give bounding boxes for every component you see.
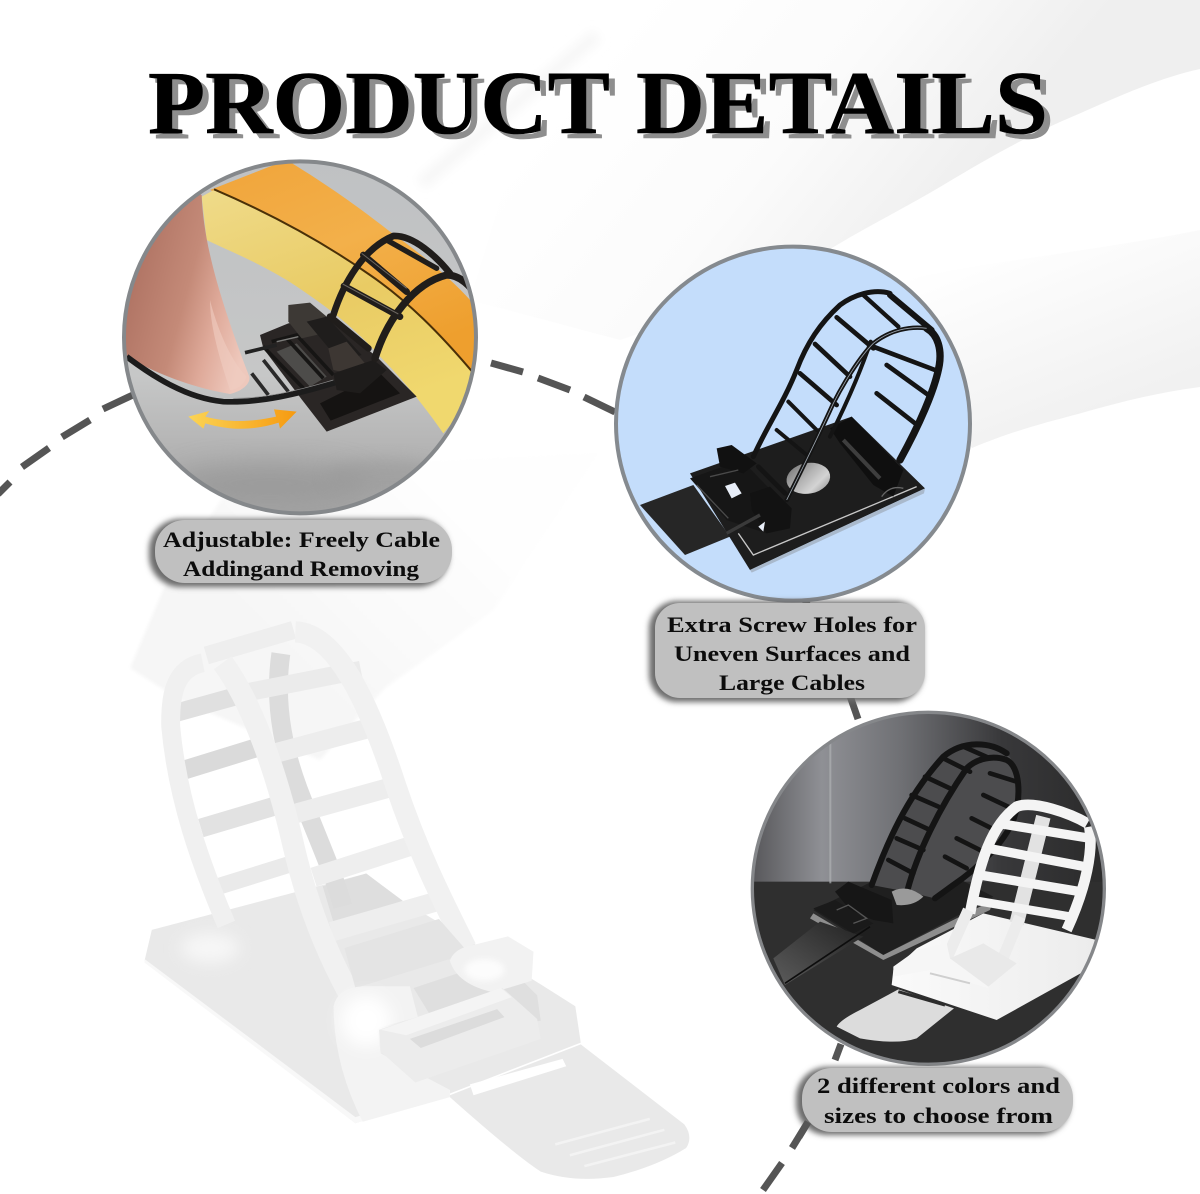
callout: colors and sizes: sizes to choose from <box>824 1103 1053 1128</box>
black ladder loop <box>872 744 1018 898</box>
cable clip body <box>260 317 417 432</box>
callout: screw holes: Large Cables <box>719 670 866 695</box>
slider and blocks <box>690 478 702 492</box>
title: PRODUCT <box>148 54 610 153</box>
yellow cable <box>202 189 475 433</box>
ladder loop <box>753 292 940 500</box>
mount ridge <box>830 417 903 497</box>
panel: adjustable photo circle <box>120 160 480 520</box>
panel: two colors photo circle <box>750 710 1110 1072</box>
title <box>148 54 1054 158</box>
black wire <box>127 357 335 402</box>
white ladder loop <box>947 805 1090 973</box>
white clip base <box>892 913 1097 1020</box>
black clip strap <box>773 922 863 985</box>
locking blocks <box>288 303 327 338</box>
ladder strap loop <box>330 236 477 358</box>
clip strap with slit <box>450 1044 689 1179</box>
callout: adjustable: Adjustable: Freely Cable <box>163 527 440 552</box>
slider frame <box>277 343 327 387</box>
callout: colors and sizes: 2 different colors and <box>817 1073 1060 1098</box>
panel: screw holes photo circle <box>610 240 980 610</box>
clip base plate <box>145 874 581 1123</box>
callout: colors and sizes <box>796 1067 1073 1137</box>
orange cable <box>210 160 478 380</box>
clip locking blocks and slider <box>334 919 541 1122</box>
title: DETAILS <box>642 59 1054 158</box>
white clip strap <box>837 989 954 1042</box>
callout: adjustable: Addingand Removing <box>183 556 419 581</box>
callout: screw holes: Extra Screw Holes for <box>667 612 917 637</box>
icon: metal screw <box>786 462 830 494</box>
title: DETAILS <box>636 54 1048 153</box>
dashed connector line <box>0 363 858 1190</box>
title: PRODUCT <box>154 59 616 158</box>
white clip block <box>893 945 952 972</box>
clip front band <box>206 630 466 992</box>
callout: screw holes: Uneven Surfaces and <box>674 641 910 666</box>
photo 1 contents <box>120 160 480 520</box>
icon: orange double arrow <box>188 409 297 429</box>
panel: white clip product photo <box>145 630 689 1179</box>
black strap <box>640 485 730 555</box>
photo 3 contents <box>750 710 1110 1072</box>
black clip plate <box>814 881 993 955</box>
photo 2 contents <box>618 248 968 599</box>
callout: adjustable <box>149 519 452 587</box>
callout: screw holes <box>649 601 925 702</box>
clip back band <box>171 654 343 924</box>
finger <box>126 194 250 394</box>
mounting plate <box>690 417 925 570</box>
